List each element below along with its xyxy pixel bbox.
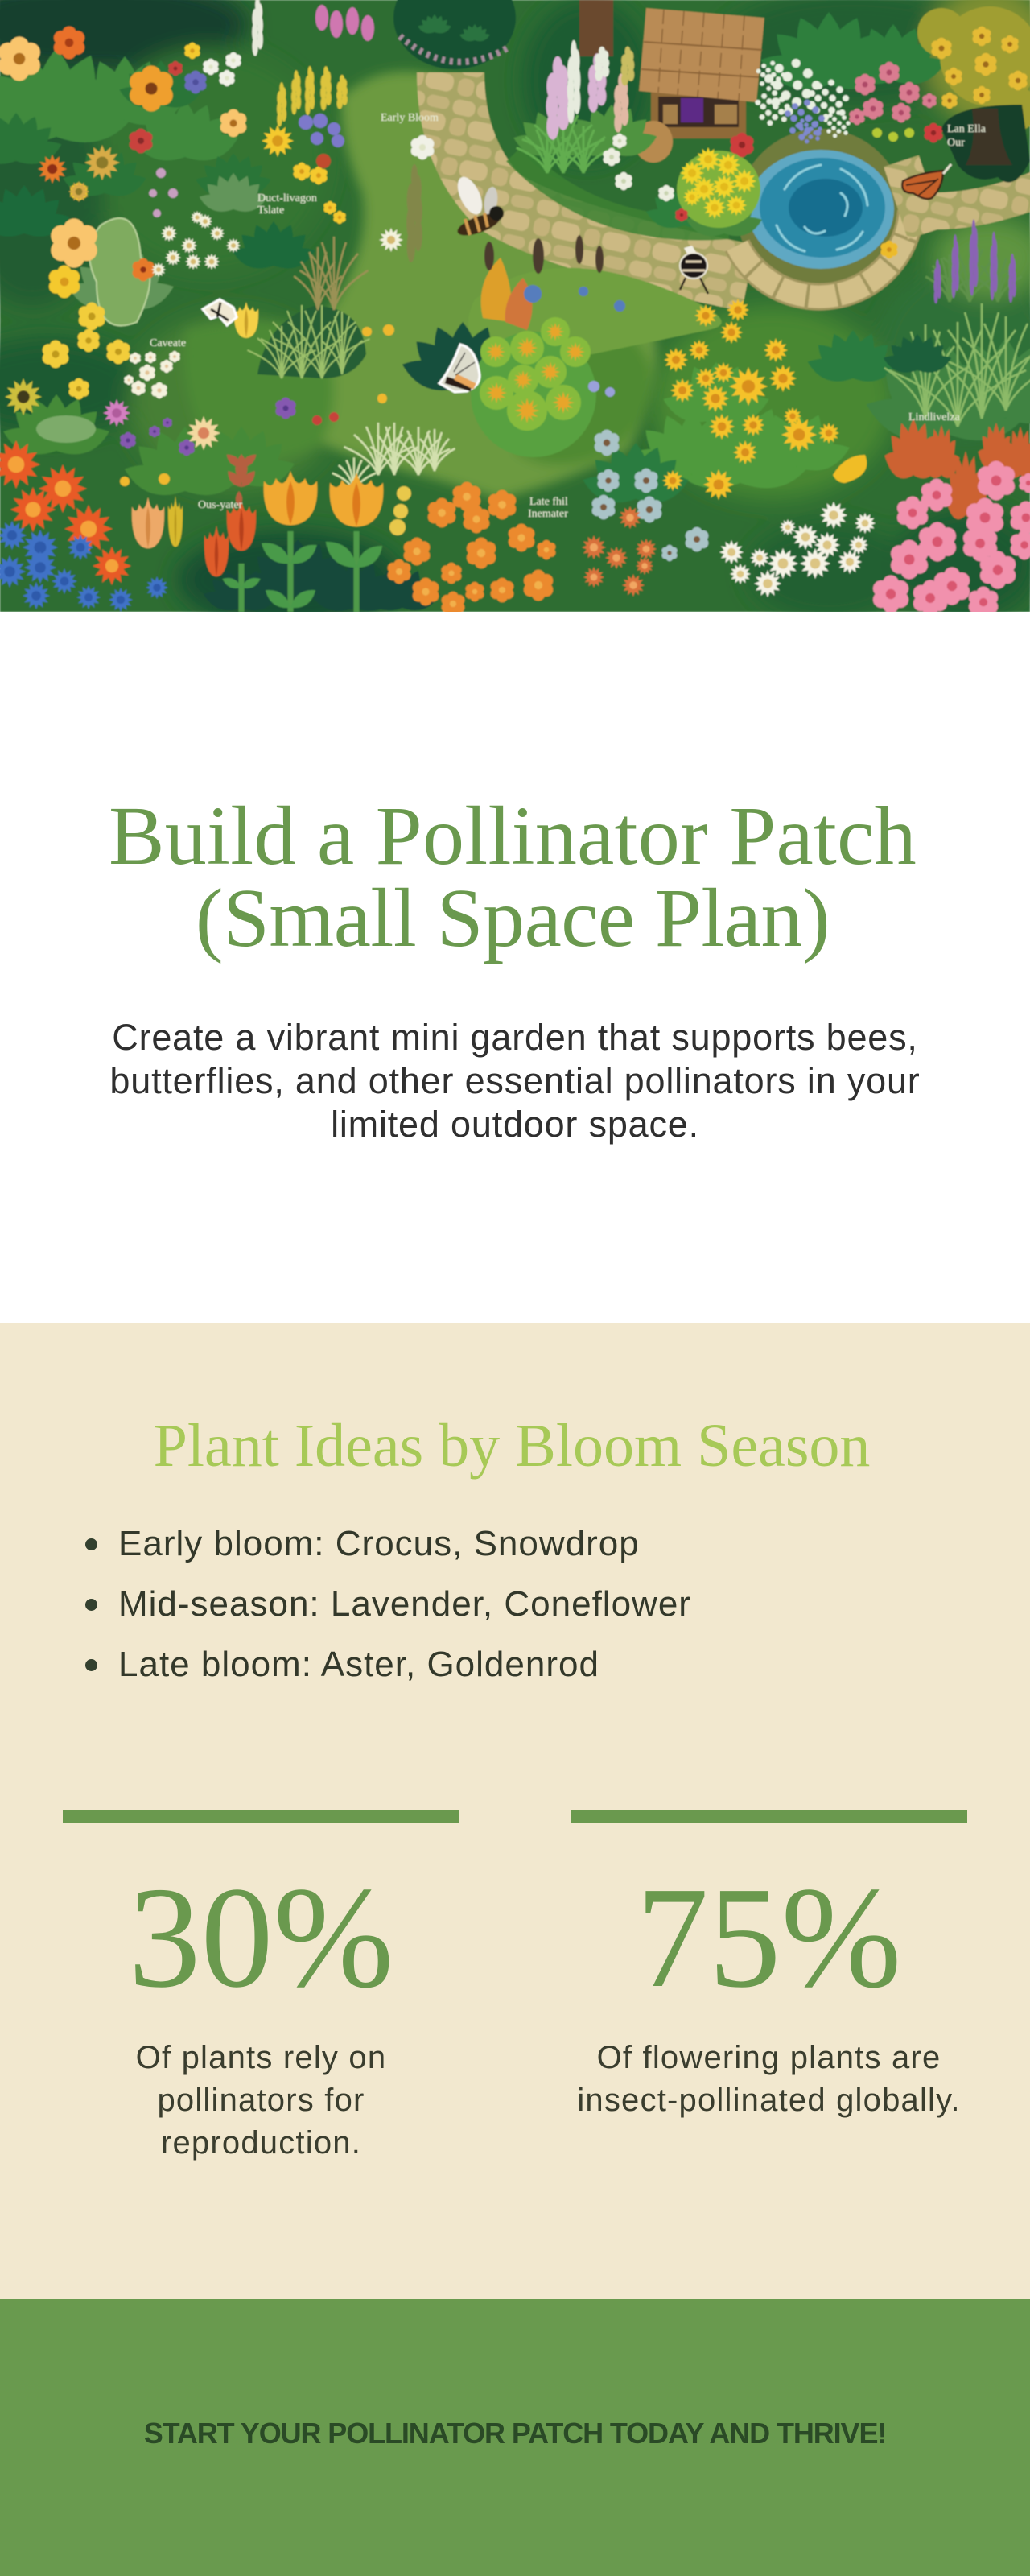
stat card: 30 percent [63, 1810, 459, 2161]
stat number: 75%: 75% [637, 1857, 901, 2017]
orange-red foliage [883, 419, 1030, 528]
garden labels: Caveate [150, 337, 186, 349]
garden labels: Our [947, 137, 965, 149]
tree trunk [579, 0, 613, 56]
title: Build a Pollinator Patch [109, 790, 917, 882]
subtitle [109, 1017, 921, 1145]
dark fan of leaves [398, 322, 528, 399]
stat text: 30%: Of plants rely on [136, 2040, 386, 2075]
flower beds [0, 27, 1030, 617]
pale grass tufts [332, 423, 455, 491]
stat text: 30%: pollinators for [157, 2083, 365, 2118]
stat text: 75% [577, 2040, 961, 2118]
title [109, 790, 917, 964]
garden labels: Ous-yater [198, 499, 243, 511]
icon: white-outlined butterfly left [203, 299, 237, 325]
garden labels: Early Bloom [381, 112, 439, 124]
icon: monarch butterfly [902, 164, 951, 199]
stat text: 75%: insect-pollinated globally. [577, 2083, 961, 2118]
lawn island [468, 268, 722, 370]
foliage clumps [0, 6, 1030, 617]
garden labels: Inemater [528, 508, 568, 520]
call to action text: START YOUR POLLINATOR PATCH TODAY AND THRIVE! [144, 2417, 886, 2450]
stat card: 75 percent [571, 1810, 967, 2118]
garden labels: Duct-livagon [258, 192, 317, 204]
subtitle: limited outdoor space. [331, 1104, 699, 1145]
heading: plant ideas: Plant Ideas by Bloom Season [154, 1412, 870, 1480]
garden ground and background foliage [0, 0, 1030, 628]
list item: late bloom: Late bloom: Aster, Goldenrod [118, 1645, 599, 1684]
tulip stems and leaves [220, 531, 387, 613]
list item: mid-season: Mid-season: Lavender, Coneflower [118, 1584, 691, 1624]
cattails [481, 235, 625, 330]
pond [737, 129, 925, 297]
stat text: 75%: Of flowering plants are [597, 2040, 941, 2075]
icon: bee on path [453, 173, 504, 240]
list item: early bloom: Early bloom: Crocus, Snowdrop [118, 1524, 640, 1563]
spires and tall blooms [252, 0, 1022, 303]
lawn [183, 72, 657, 499]
stat text: 30% [136, 2040, 386, 2161]
stone path [451, 72, 1030, 278]
grass clumps: centre bed [248, 237, 370, 378]
icon: white-outlined butterfly center [439, 345, 480, 392]
panel: plant ideas and statistics [0, 1323, 1030, 2299]
garden labels: Late fhil [529, 496, 568, 508]
subtitle: butterflies, and other essential pollinators in your [109, 1060, 921, 1101]
garden labels: Lan Ella [947, 123, 987, 135]
icon: black bumblebee [680, 246, 708, 294]
garden labels: Tslate [258, 204, 284, 217]
garden labels: Lindlivelza [908, 411, 961, 423]
bee hut [634, 8, 764, 163]
hero garden illustration [0, 0, 1030, 612]
stat number: 30%: 30% [129, 1857, 393, 2017]
hedge [393, 0, 516, 69]
list: plant ideas by season [85, 1524, 691, 1684]
title: (Small Space Plan) [196, 872, 830, 964]
subtitle: Create a vibrant mini garden that supports bees, [112, 1017, 918, 1058]
stat text: 30%: reproduction. [161, 2125, 361, 2161]
panel: call to action [0, 2299, 1030, 2576]
garden labels [150, 112, 987, 520]
